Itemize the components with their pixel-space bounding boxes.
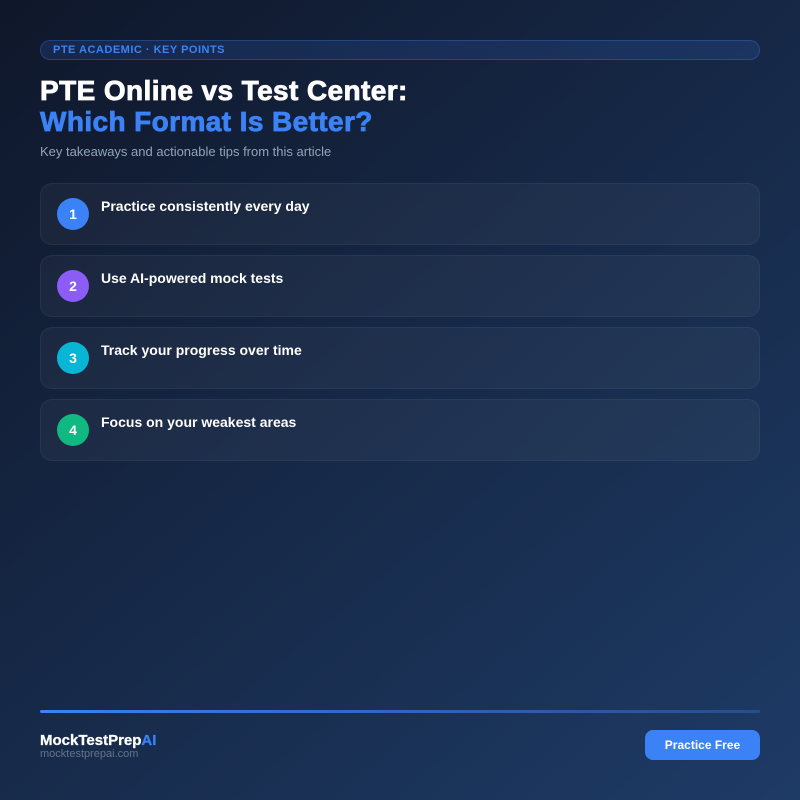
button: Practice Free: Practice Free — [665, 738, 740, 752]
title — [40, 75, 408, 137]
icon: number 1: 1 — [69, 206, 77, 222]
icon: number 3 — [57, 342, 89, 374]
footer divider line — [40, 710, 760, 713]
text: point 1: Practice consistently every day — [101, 198, 310, 214]
panel: key point 4 — [40, 399, 760, 461]
title: PTE Online vs Test Center: — [40, 75, 408, 106]
subtitle: Key takeaways and actionable tips from this article — [40, 144, 331, 159]
panel: key point 1 — [40, 183, 760, 245]
icon: number 4 — [57, 414, 89, 446]
brand URL: mocktestprepai.com — [40, 748, 138, 760]
text: point 3: Track your progress over time — [101, 342, 302, 358]
badge: PTE Academic key points — [40, 40, 760, 60]
text: point 4: Focus on your weakest areas — [101, 414, 296, 430]
icon: number 2 — [57, 270, 89, 302]
icon: number 3: 3 — [69, 350, 77, 366]
icon: number 2: 2 — [69, 278, 77, 294]
badge: PTE Academic key points: PTE ACADEMIC · KEY POINTS — [53, 44, 225, 56]
icon: number 4: 4 — [69, 422, 77, 438]
icon: number 1 — [57, 198, 89, 230]
brand name: MockTestPrepAI — [40, 732, 156, 749]
panel: key point 3 — [40, 327, 760, 389]
text: point 2: Use AI-powered mock tests — [101, 270, 283, 286]
title: Which Format Is Better? — [40, 106, 373, 137]
button: Practice Free — [645, 730, 760, 760]
panel: key point 2 — [40, 255, 760, 317]
